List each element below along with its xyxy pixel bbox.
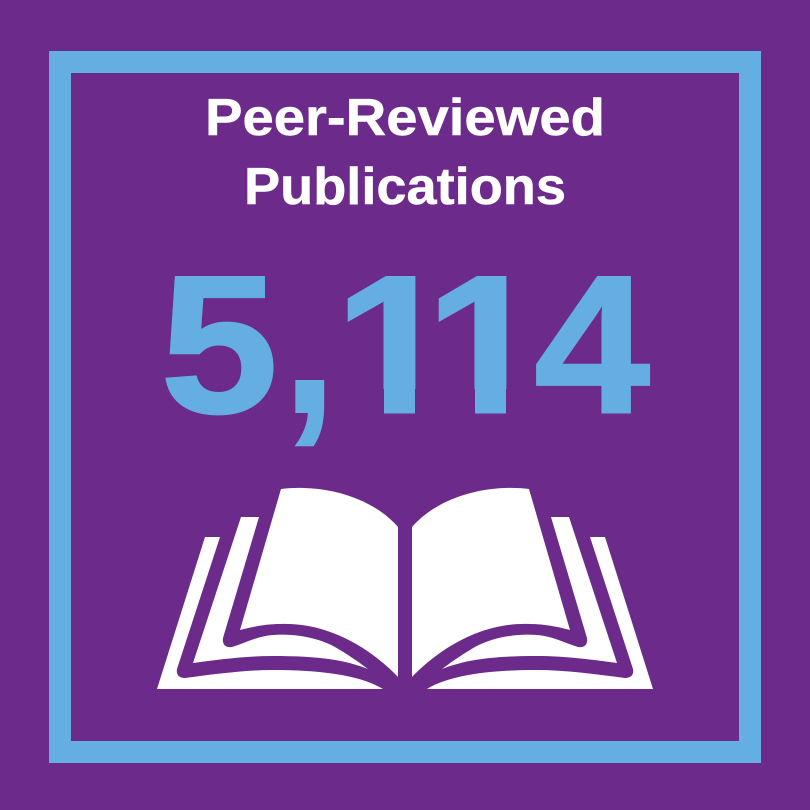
- big number: 5: [160, 235, 278, 455]
- big number: 1: [425, 235, 546, 454]
- big number: [160, 218, 650, 458]
- big number: ,: [282, 218, 337, 458]
- blue square frame: [60, 62, 750, 752]
- title: [205, 89, 605, 216]
- big number: 1: [334, 235, 455, 454]
- title: Publications: [244, 158, 566, 216]
- title: Peer-Reviewed: [205, 89, 605, 147]
- big number: 4: [534, 235, 650, 455]
- icon: open book: [157, 488, 653, 689]
